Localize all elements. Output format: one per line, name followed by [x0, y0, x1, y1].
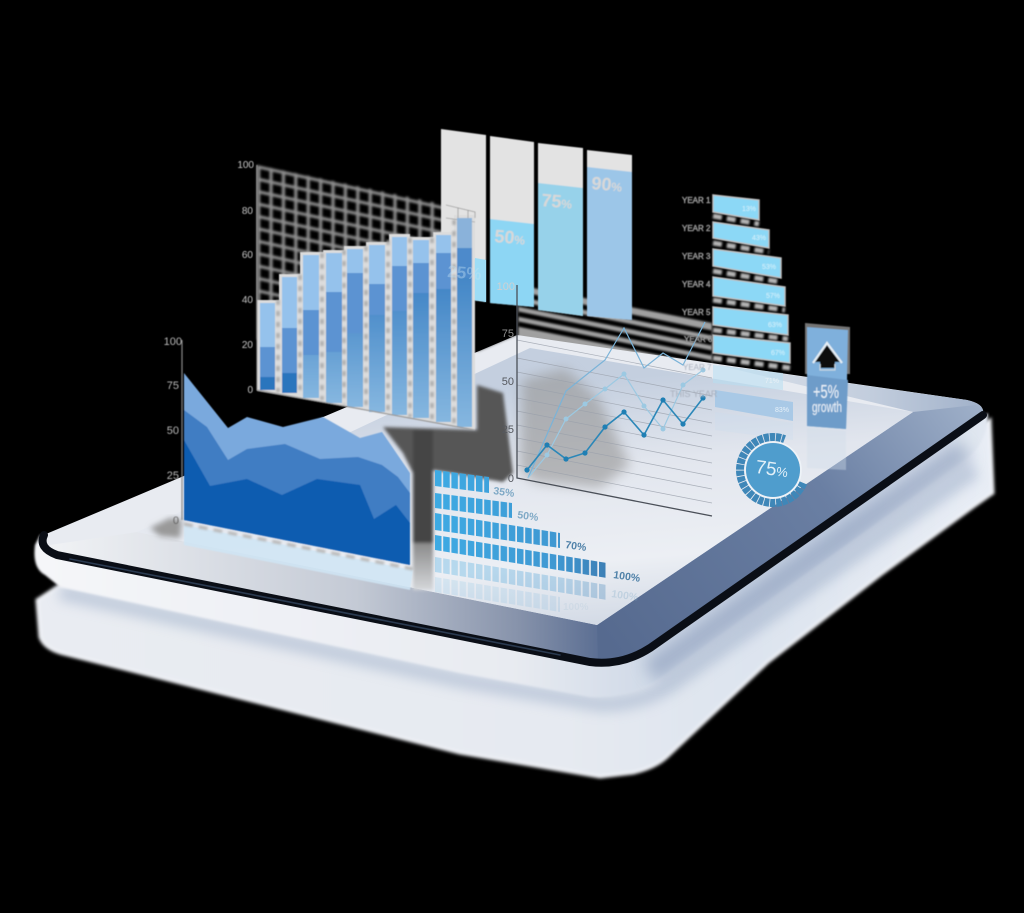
tablet reflection — [37, 420, 993, 777]
year labels: YEAR 4 — [682, 280, 711, 289]
year bar 5 — [713, 307, 788, 335]
bar chart axis labels: 60 — [242, 250, 253, 261]
series: dark line — [524, 395, 706, 473]
bar 2 — [282, 277, 297, 393]
area axis labels: 25 — [167, 470, 179, 482]
bar 5 — [347, 249, 363, 407]
blue window and 25% label showing through bars: 25% — [447, 262, 482, 284]
tile progress bars — [435, 470, 642, 613]
series: mid line — [528, 368, 706, 478]
year labels: YEAR 1 — [682, 196, 711, 205]
stair backing between bars — [257, 215, 475, 430]
area axis labels — [164, 336, 182, 527]
bar chart axis — [257, 165, 475, 430]
bottom bezel — [50, 532, 598, 662]
icon: house — [813, 343, 842, 370]
year bar 2: 43% — [752, 235, 766, 242]
area reflection — [184, 525, 413, 590]
bar 4 — [326, 253, 342, 403]
year bar 2 — [713, 222, 769, 248]
dotted grey gaps between bars — [713, 216, 790, 368]
line chart axis labels: 50 — [502, 376, 514, 388]
column 50% — [490, 136, 534, 307]
column 75% — [538, 143, 583, 316]
area axis labels: 75 — [167, 380, 179, 392]
bar 8 — [413, 240, 429, 418]
bar 9 — [436, 235, 451, 422]
bar chart axis labels: 100 — [237, 160, 254, 171]
year labels: YEAR 2 — [682, 224, 711, 233]
year labels: YEAR 5 — [682, 308, 711, 317]
year bar 5: 63% — [768, 322, 782, 329]
year bar 4 — [713, 277, 785, 306]
column 90%: 90% — [591, 173, 623, 196]
black tablet edge — [43, 415, 983, 663]
bar chart axis labels: 0 — [247, 385, 253, 396]
thin grid over columns — [446, 205, 475, 222]
row 70%: 70% — [565, 539, 588, 554]
right bezel — [597, 405, 983, 662]
area axis labels: 100 — [164, 336, 182, 348]
row 100% — [435, 535, 642, 585]
year labels: YEAR 7 — [683, 363, 712, 372]
year labels: YEAR 3 — [682, 252, 711, 261]
grey and black stripes behind line chart — [518, 285, 712, 372]
area axis labels: 50 — [167, 425, 179, 437]
bar 10 — [457, 218, 472, 427]
year labels: YEAR 6 — [684, 335, 713, 344]
bar 6 — [369, 245, 385, 412]
light area — [184, 373, 410, 565]
line chart axis labels: 0 — [508, 473, 514, 485]
faded row: 100% — [611, 588, 640, 604]
series: outline line — [528, 322, 705, 478]
year bar 6 — [713, 335, 790, 363]
bar 7 — [392, 237, 407, 415]
dark area — [184, 440, 410, 565]
year bar 1: 13% — [742, 206, 756, 213]
stacked bar chart — [237, 160, 475, 430]
bar 3 — [303, 255, 319, 398]
growth panel: growth — [812, 399, 842, 416]
mottled grey area behind line chart — [520, 368, 630, 488]
blue band along right side of body — [650, 450, 965, 672]
year bar 1 — [713, 195, 759, 220]
year bar 8: 83% — [775, 407, 789, 414]
row 35% — [435, 470, 514, 497]
year bar 3: 53% — [762, 264, 776, 271]
year bar 3 — [713, 249, 781, 278]
growth panel — [805, 323, 850, 470]
line chart axis labels: 100 — [497, 281, 515, 293]
area axis labels: 0 — [173, 515, 179, 527]
column 75%: 75% — [541, 190, 573, 213]
line chart — [497, 281, 712, 516]
row 100%: 100% — [613, 569, 642, 585]
area chart — [164, 336, 413, 590]
column 25% — [441, 129, 486, 302]
grid panel of bar chart — [257, 165, 446, 340]
year labels: THIS YEAR — [670, 389, 718, 399]
grey smudge left of area chart — [150, 518, 182, 538]
tablet screen and bezel — [43, 335, 983, 664]
line chart axis labels: 75 — [502, 328, 514, 340]
middle area — [184, 410, 410, 565]
mottled gaps between bars — [278, 220, 454, 425]
line chart axis labels: 25 — [502, 424, 514, 436]
infographic: tablet with floating 3D charts — [32, 128, 998, 781]
top right bezel — [713, 364, 983, 414]
dark shadow blotch behind charts — [383, 307, 517, 590]
bezel — [43, 335, 983, 664]
screen surface — [137, 348, 913, 625]
axes — [517, 285, 712, 516]
bar chart axis labels: 40 — [242, 295, 253, 306]
line chart axis labels — [497, 281, 515, 485]
reflection shadow under body — [60, 470, 975, 704]
year bar 9 faded — [715, 412, 793, 440]
donut gauge 75%: 75% — [754, 457, 790, 482]
row 50%: 50% — [517, 509, 540, 524]
year bar 7 faded: 71% — [765, 378, 779, 385]
year bar 4: 57% — [766, 293, 780, 300]
year bars — [670, 195, 793, 440]
faded row lower: 100% — [563, 602, 589, 613]
growth label: +5% — [813, 382, 839, 402]
column 90% — [587, 150, 632, 320]
row 70% — [435, 513, 588, 554]
blue window and 25% label showing through bars — [447, 258, 486, 302]
faded row lower — [435, 577, 589, 613]
dotted base line — [184, 524, 413, 569]
faded row — [435, 557, 640, 604]
horizontal gridlines — [517, 340, 712, 503]
column 50%: 50% — [494, 226, 526, 249]
year bar 6: 67% — [771, 350, 785, 357]
year bar 8 — [715, 390, 793, 421]
year labels — [670, 196, 718, 399]
row 50% — [435, 493, 538, 521]
bar chart axis labels: 20 — [242, 340, 253, 351]
bar chart axis labels — [237, 160, 254, 396]
donut gauge 75% — [730, 427, 816, 513]
area axis — [181, 340, 183, 520]
bar 1 — [260, 303, 275, 390]
row 35%: 35% — [493, 485, 516, 500]
percentage columns — [441, 129, 632, 320]
tablet body — [34, 413, 988, 697]
year bar 7 faded — [713, 365, 783, 390]
bar chart axis labels: 80 — [242, 206, 253, 217]
